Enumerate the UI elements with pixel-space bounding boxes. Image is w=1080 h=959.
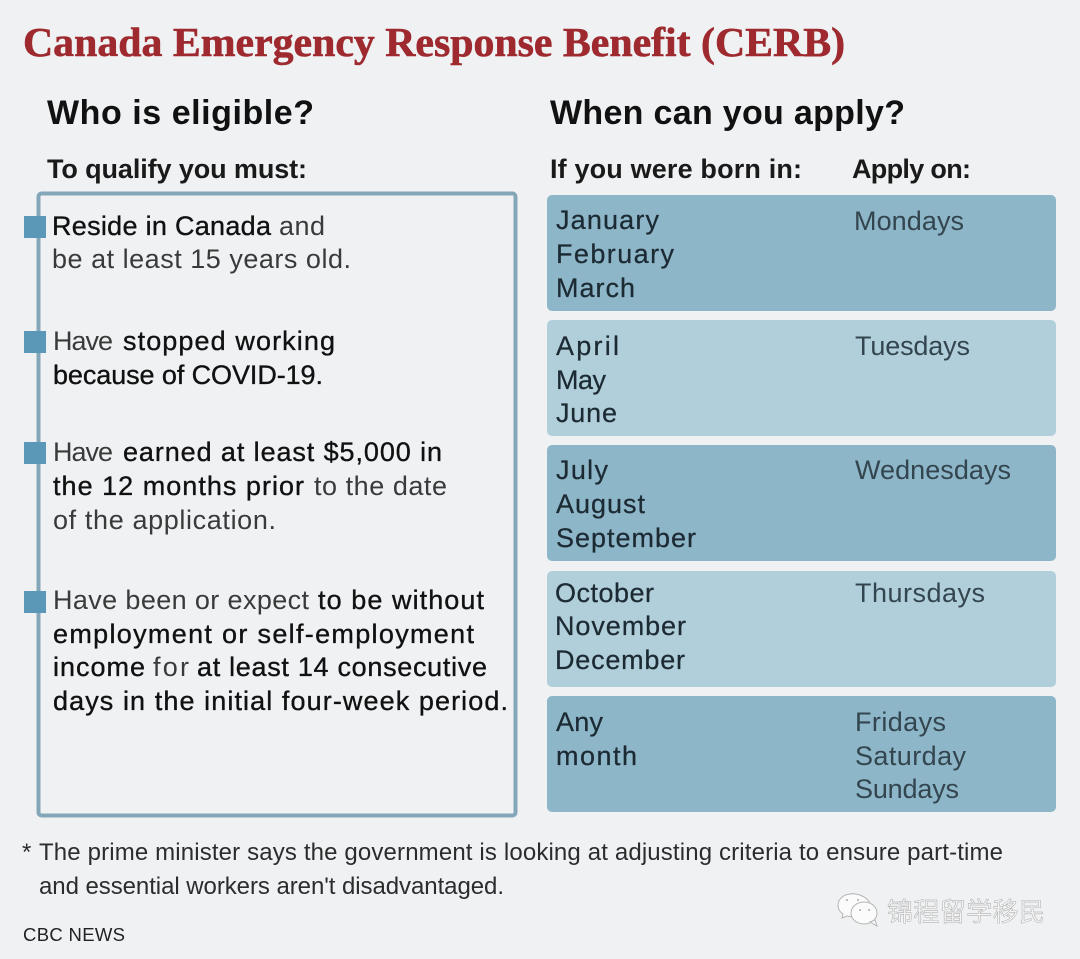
row: January to March, Mondays: Mondays xyxy=(854,206,964,236)
subheading: apply on: Apply on: xyxy=(852,154,971,184)
criterion: residence: and xyxy=(279,211,325,241)
row: October to December, Thursdays xyxy=(547,571,1056,687)
criterion: without income: at least 14 consecutive xyxy=(197,652,487,682)
row: April to June, Tuesdays: April xyxy=(556,331,619,361)
criterion: earnings xyxy=(24,437,447,535)
heading: who is eligible: Who is eligible? xyxy=(47,94,314,132)
criterion: without income: days in the initial four-week period. xyxy=(53,686,508,716)
heading: when can you apply: When can you apply? xyxy=(550,94,905,132)
row: October to December, Thursdays: November xyxy=(555,611,686,641)
criterion: earnings: earned at least $5,000 in xyxy=(123,437,442,467)
row: any month, Fridays Saturday Sundays: Saturday xyxy=(855,741,966,771)
criterion: stopped working xyxy=(24,326,335,390)
row: any month, Fridays Saturday Sundays: month xyxy=(556,741,637,771)
criterion: stopped working: because of COVID-19. xyxy=(53,360,323,390)
row: any month, Fridays Saturday Sundays xyxy=(547,696,1056,812)
row: July to September, Wednesdays: August xyxy=(556,489,645,519)
row: any month, Fridays Saturday Sundays: Fridays xyxy=(855,707,946,737)
panel: eligibility criteria xyxy=(24,194,516,816)
title: Canada Emergency Response Benefit (CERB) xyxy=(23,19,845,65)
row: any month, Fridays Saturday Sundays: Any xyxy=(556,707,604,737)
row: October to December, Thursdays: Thursdays xyxy=(855,578,985,608)
criterion: without income: employment or self-employment xyxy=(53,619,474,649)
icon: chat bubbles xyxy=(838,894,877,926)
row: January to March, Mondays: January xyxy=(556,205,660,235)
criterion: residence xyxy=(24,211,351,274)
row: April to June, Tuesdays: Tuesdays xyxy=(855,331,970,361)
criterion: without income: income xyxy=(53,652,145,682)
row: July to September, Wednesdays xyxy=(547,445,1056,561)
footnote: The prime minister says the government is looking at adjusting criteria to ensure part-time xyxy=(39,839,1003,866)
footnote: and essential workers aren't disadvantaged. xyxy=(39,873,504,900)
row: October to December, Thursdays: October xyxy=(555,578,654,608)
panel border xyxy=(38,194,516,816)
source: CBC News: CBC NEWS xyxy=(23,924,125,945)
criterion: without income: to be without xyxy=(318,585,484,615)
criterion: residence: Reside in Canada xyxy=(52,211,272,241)
criterion: residence: be at least 15 years old. xyxy=(52,244,351,274)
row: April to June, Tuesdays xyxy=(547,320,1056,436)
watermark text: 锦程留学移民 xyxy=(887,892,1045,929)
row: July to September, Wednesdays: July xyxy=(556,455,608,485)
row: April to June, Tuesdays: June xyxy=(556,398,617,428)
subheading: born in: If you were born in: xyxy=(550,154,802,184)
row: any month, Fridays Saturday Sundays: Sundays xyxy=(855,774,959,804)
row: January to March, Mondays: March xyxy=(556,273,635,303)
criterion: earnings: Have xyxy=(53,437,113,467)
criterion: earnings: to the date xyxy=(314,471,447,501)
row: January to March, Mondays: February xyxy=(556,239,674,269)
criterion: without income: for xyxy=(153,652,189,682)
subheading: to qualify: To qualify you must: xyxy=(47,154,307,184)
footnote xyxy=(22,839,1003,900)
row: April to June, Tuesdays: May xyxy=(556,365,606,395)
row: January to March, Mondays xyxy=(547,195,1056,311)
criterion: without income xyxy=(24,585,508,716)
footnote: * xyxy=(22,839,31,866)
criterion: stopped working: stopped working xyxy=(123,326,335,356)
criterion: earnings: the 12 months prior xyxy=(53,471,304,501)
row: October to December, Thursdays: December xyxy=(555,645,685,675)
criterion: without income: Have been or expect xyxy=(53,585,309,615)
criterion: earnings: of the application. xyxy=(53,505,276,535)
row: July to September, Wednesdays: September xyxy=(556,523,696,553)
watermark xyxy=(838,892,1045,929)
criterion: stopped working: Have xyxy=(53,326,113,356)
row: July to September, Wednesdays: Wednesdays xyxy=(855,455,1011,485)
